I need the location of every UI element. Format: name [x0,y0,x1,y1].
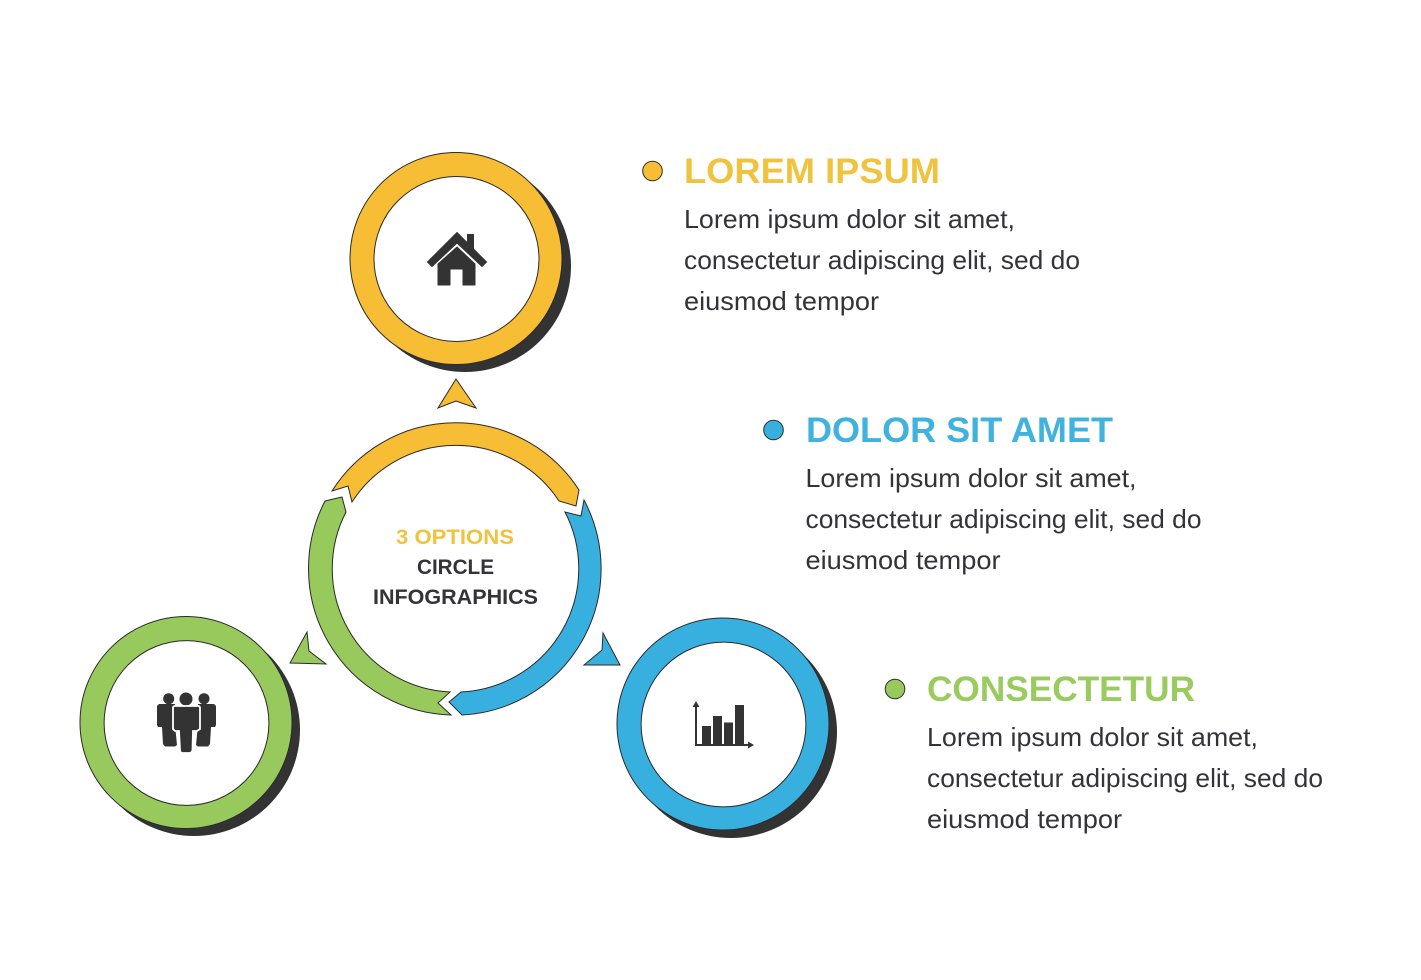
body text [806,463,1202,575]
body text: eiusmod tempor [927,804,1122,834]
ring arc: green [308,497,451,715]
body text: Lorem ipsum dolor sit amet, [806,463,1136,493]
icon: bar chart [692,701,754,748]
circle: chart (blue) [617,618,837,838]
body text [927,722,1323,834]
text block: dolor sit amet [764,411,1202,575]
bullet: blue [764,420,783,440]
body text: consectetur adipiscing elit, sed do [927,763,1323,793]
arrowhead: blue [584,633,620,665]
body text: consectetur adipiscing elit, sed do [806,504,1202,534]
body text: eiusmod tempor [806,545,1001,575]
body text: Lorem ipsum dolor sit amet, [684,204,1015,234]
center label: INFOGRAPHICS [373,586,538,609]
central ring [308,423,601,715]
center label: 3 OPTIONS [396,526,514,549]
icon: people [157,692,216,753]
heading: consectetur: CONSECTETUR [927,670,1195,709]
body text [684,204,1080,316]
body text: eiusmod tempor [684,286,879,316]
text block: consectetur [885,670,1323,834]
arrowhead: green [290,632,326,664]
heading: dolor sit amet: DOLOR SIT AMET [806,411,1113,450]
bullet: yellow [643,161,662,181]
ring arc: yellow [332,423,579,506]
bullet: green [885,679,905,699]
center label: CIRCLE [417,556,494,579]
circle: home (yellow) [350,152,571,372]
arrowhead: yellow [438,379,476,408]
text block: lorem ipsum [643,152,1080,316]
heading: lorem ipsum: LOREM IPSUM [684,152,940,191]
body text: consectetur adipiscing elit, sed do [684,245,1080,275]
body text: Lorem ipsum dolor sit amet, [927,722,1258,752]
icon: house [428,232,486,285]
circle: people (green) [80,616,300,836]
ring arc: blue [449,500,601,715]
center label [373,526,538,609]
